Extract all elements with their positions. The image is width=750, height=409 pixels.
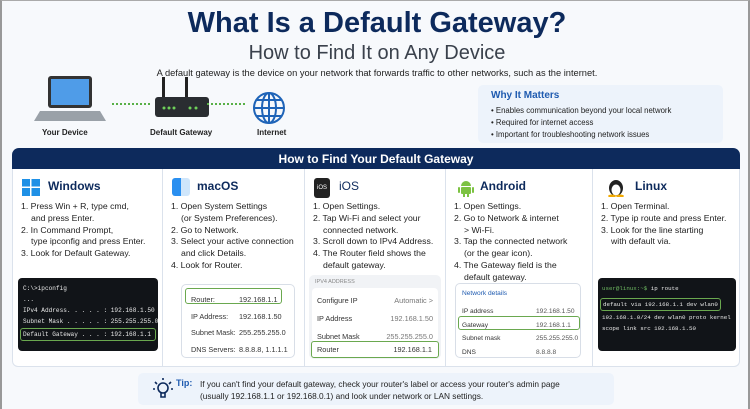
steps: 1. Open Terminal. [601,201,669,211]
card: router info: 192.168.1.50 [239,312,282,320]
icon: ios [314,178,330,198]
steps [313,201,433,270]
icon: windows [22,179,40,196]
tip label: Tip: [176,378,192,388]
steps: 3. Scroll down to IPv4 Address. [313,236,433,246]
terminal: default via 192.168.1.1 dev wlan0 [603,301,718,308]
terminal: scope link src 192.168.1.50 [602,325,696,332]
label: your device: Your Device [42,128,88,137]
terminal: ... [23,296,34,303]
steps: default gateway. [464,272,527,282]
steps [601,201,726,246]
title: What Is a Default Gateway? [188,7,566,39]
label: internet: Internet [257,128,286,137]
steps: 3. Tap the connected network [454,236,567,246]
card: router info: 192.168.1.1 [239,295,278,304]
icon: laptop [34,76,106,121]
label: default gateway: Default Gateway [150,128,212,137]
terminal: Subnet Mask . . . . . : 255.255.255.0 [23,318,158,325]
card: ios settings: Subnet Mask [317,332,360,341]
column: ios [305,169,446,367]
heading: iOS [339,179,359,193]
icon: android [458,181,474,197]
card: ios settings: IP Address [317,314,352,323]
tip callout [138,373,614,405]
steps: (or System Preferences). [181,213,278,223]
terminal: Default Gateway . . . : 192.168.1.1 [23,331,151,338]
card: ios settings: 192.168.1.1 [393,345,432,354]
card: network details: Network details [462,290,507,297]
steps: 2. Type ip route and press Enter. [601,213,726,223]
panel: why it matters [478,85,723,143]
steps: 3. Look for the line starting [601,225,703,235]
heading: macOS [197,179,238,193]
steps: 2. Go to Network. [171,225,239,235]
dots [112,103,150,105]
card: router info: IP Address: [191,312,228,320]
steps: type ipconfig and press Enter. [31,236,145,246]
icon: ios: iOS [317,185,327,191]
steps: 1. Open Settings. [454,201,521,211]
tip text: (usually 192.168.1.1 or 192.168.0.1) and look under network or LAN settings. [200,391,483,401]
panel: steps container [12,169,740,367]
icon: lightbulb [153,378,173,398]
card: network details: 192.168.1.50 [536,308,575,315]
card: ios settings: Automatic > [394,296,433,305]
steps: (or the gear icon). [464,248,533,258]
terminal [598,278,736,351]
steps: 4. The Router field shows the [313,248,426,258]
card: router info: Subnet Mask: [191,328,236,337]
card: ios settings [309,275,441,359]
subtitle: How to Find It on Any Device [249,42,505,64]
steps: > Wi-Fi. [464,225,494,235]
heading: Linux [635,179,667,193]
steps: 1. Open Settings. [313,201,380,211]
card: router info [181,284,295,358]
description: A default gateway is the device on your network that forwards traffic to other networks, such as the internet. [157,68,597,78]
column: android [446,169,593,367]
card: network details [455,283,581,358]
bullets: • Enables communication beyond your local network [491,106,671,115]
bullets: • Required for internet access [491,118,593,127]
card: network details: Subnet mask [462,335,500,342]
card: network details: DNS [462,348,476,356]
steps: default gateway. [323,260,386,270]
card: router info: DNS Servers: [191,344,236,354]
steps [171,201,294,270]
header bar: How to Find Your Default Gateway [279,152,473,166]
steps: 2. Tap Wi-Fi and select your [313,213,421,223]
card: router info: 8.8.8.8, 1.1.1.1 [239,344,288,354]
steps: with default via. [611,236,671,246]
steps: and press Enter. [31,213,94,223]
steps: 1. Open System Settings [171,201,267,211]
column: macos [163,169,305,367]
steps: 2. In Command Prompt, [21,225,113,235]
steps: and click Details. [181,248,246,258]
header bar [12,148,740,170]
column: windows [13,169,163,367]
bullets: • Important for troubleshooting network issues [491,130,649,139]
bullets [491,106,672,139]
steps [21,201,145,258]
card: network details: Gateway [462,322,488,328]
card: ios settings: 192.168.1.50 [390,314,433,323]
steps: 1. Press Win + R, type cmd, [21,201,129,211]
icon: router [155,77,209,117]
steps: 4. The Gateway field is the [454,260,557,270]
card: ios settings: Configure IP [317,296,358,305]
tip text: If you can't find your default gateway, check your router's label or access your router's admin page [200,379,560,389]
steps: 3. Select your active connection [171,236,294,246]
icon: finder [172,178,190,196]
card: network details: IP address [462,308,493,315]
terminal: C:\>ipconfig [23,285,67,292]
icon: globe [253,92,285,124]
steps: 2. Go to Network & internet [454,213,559,223]
card: ios settings: IPV4 ADDRESS [315,279,355,285]
card: ios settings: 255.255.255.0 [386,332,433,341]
column: linux [598,179,736,351]
steps: 4. Look for Router. [171,260,242,270]
steps: connected network. [323,225,398,235]
tip text [200,379,560,401]
card: network details: 255.255.255.0 [536,335,578,342]
card: ios settings: Router [317,345,339,354]
terminal: user@linux:~$ ip route 192.168.1.0/24 dev wlan0 proto kernel [602,285,731,321]
icon: tux [608,180,624,197]
heading: Why It Matters [491,90,559,101]
heading: Android [480,179,526,193]
card: router info: Router: [191,295,215,304]
terminal: IPv4 Address. . . . . : 192.168.1.50 [23,307,155,314]
diagram: network path [34,76,286,137]
card: network details: 192.168.1.1 [536,322,571,328]
card: router info: 255.255.255.0 [239,328,286,337]
heading: Windows [48,179,101,193]
steps [454,201,568,282]
card: network details: 8.8.8.8 [536,348,556,356]
steps: 3. Look for Default Gateway. [21,248,130,258]
dots [207,103,245,105]
terminal [18,278,158,351]
